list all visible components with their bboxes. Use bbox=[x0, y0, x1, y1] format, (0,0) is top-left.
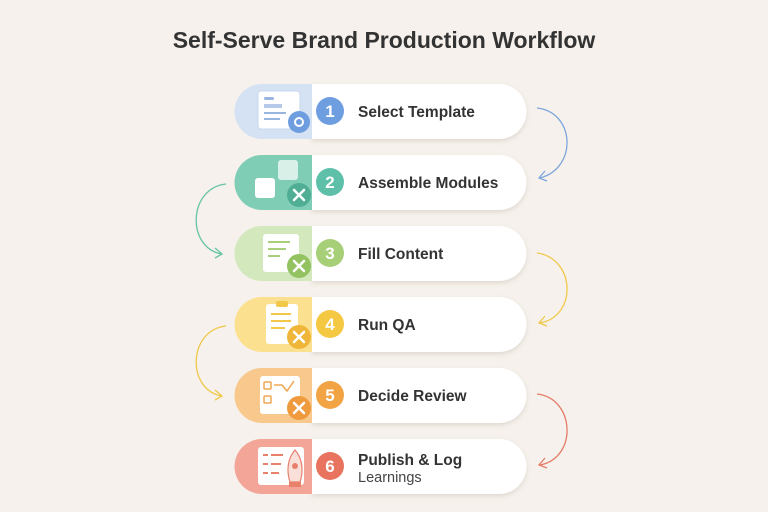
icon: checklist bbox=[260, 376, 311, 420]
step 3: Fill Content: 3 bbox=[325, 244, 335, 263]
step 3: Fill Content: Fill Content bbox=[358, 246, 443, 263]
step 3: Fill Content bbox=[234, 226, 526, 281]
arrow 2 to 3 bbox=[196, 184, 226, 258]
step 2: Assemble Modules: 2 bbox=[325, 173, 335, 192]
number 1 bbox=[316, 97, 344, 125]
step 1: Select Template bbox=[234, 84, 526, 139]
arrow 3 to 4 bbox=[537, 253, 567, 326]
step 6: Publish & Log Learnings: Publish & Log bbox=[358, 452, 462, 469]
step 1: Select Template: Select Template bbox=[358, 104, 475, 121]
step 6: Publish & Log Learnings bbox=[234, 439, 526, 494]
step 6: Publish & Log Learnings: Learnings bbox=[358, 470, 422, 486]
step 4: Run QA: Run QA bbox=[358, 317, 416, 334]
arrow 4 to 5 bbox=[196, 326, 226, 400]
number 4 bbox=[316, 310, 344, 338]
icon: template with gear bbox=[258, 91, 310, 133]
icon: document bbox=[263, 234, 311, 278]
step 4: Run QA: 4 bbox=[325, 315, 335, 334]
number 2 bbox=[316, 168, 344, 196]
step 5: Decide Review bbox=[234, 368, 526, 423]
icon: puzzle pieces bbox=[255, 160, 311, 207]
step 2: Assemble Modules bbox=[234, 155, 526, 210]
step 5: Decide Review: 5 bbox=[325, 386, 335, 405]
step 2: Assemble Modules: Assemble Modules bbox=[358, 175, 498, 192]
number 6 bbox=[316, 452, 344, 480]
step 6: Publish & Log Learnings: 6 bbox=[325, 457, 335, 476]
arrow 5 to 6 bbox=[537, 394, 567, 468]
arrow 1 to 2 bbox=[537, 108, 567, 181]
step 1: Select Template: 1 bbox=[325, 102, 335, 121]
step 5: Decide Review: Decide Review bbox=[358, 388, 467, 405]
icon: clipboard bbox=[266, 301, 311, 349]
number 5 bbox=[316, 381, 344, 409]
step 4: Run QA bbox=[234, 297, 526, 352]
number 3 bbox=[316, 239, 344, 267]
icon: checklist and rocket bbox=[258, 447, 304, 487]
title: Self-Serve Brand Production Workflow bbox=[173, 27, 595, 53]
